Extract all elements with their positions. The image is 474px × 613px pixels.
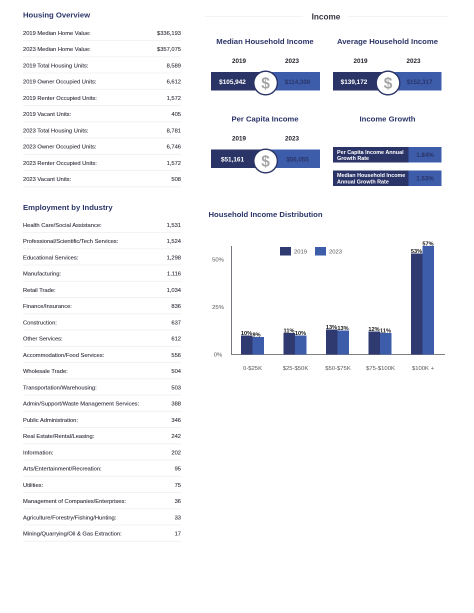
table: housing rows: 6,612 (167, 80, 181, 86)
bar chart: 11% (380, 328, 391, 334)
table: industry rows: Information: (23, 450, 54, 456)
legend (280, 247, 343, 256)
card: average household income: 2023 (406, 58, 421, 65)
table: industry rows: 17 (175, 532, 181, 538)
table: industry rows: Wholesale Trade: (23, 369, 68, 375)
bar chart (212, 242, 445, 372)
card: median household income: 2019 (232, 58, 246, 65)
card: per capita income: $51,161 (221, 157, 244, 164)
table: industry rows: 346 (171, 418, 181, 424)
table: housing rows: 8,589 (167, 64, 181, 70)
bar chart: 50% (212, 258, 225, 264)
table: industry rows: Accommodation/Food Services: (23, 353, 105, 359)
card: income growth: 1.84% (416, 152, 434, 159)
table: industry rows: 1,524 (167, 239, 182, 245)
card: income growth: Per Capita Income Annual (337, 150, 404, 156)
card: median household income: $114,300 (285, 79, 311, 86)
table: industry rows: Management of Companies/Enterprises: (23, 499, 126, 505)
table: housing rows: 2019 Renter Occupied Units: (23, 96, 97, 102)
bar chart: 53% (411, 249, 422, 255)
table: industry rows: 637 (171, 320, 181, 326)
table: industry rows: Finance/Insurance: (23, 304, 72, 310)
legend: 2023 (329, 250, 343, 256)
card: per capita income: 2023 (285, 136, 299, 143)
icon: dollar coin: $ (261, 76, 270, 92)
table: industry rows: Public Administration: (23, 418, 78, 424)
table: housing rows: 2019 Owner Occupied Units: (23, 80, 97, 86)
panel: employment by industry (23, 203, 182, 541)
card: per capita income (211, 115, 320, 173)
table: industry rows: 556 (171, 353, 181, 359)
table: housing rows: 2023 Total Housing Units: (23, 128, 89, 134)
card: income growth: Income Growth (360, 115, 416, 124)
table: housing rows: 2019 Total Housing Units: (23, 64, 89, 70)
table: industry rows: Admin/Support/Waste Management Services: (23, 402, 140, 408)
bar chart: $50-$75K (325, 366, 351, 372)
card: median household income (211, 37, 320, 95)
heading: income: Income (312, 12, 341, 21)
bar chart: 0% (214, 352, 223, 358)
table: industry rows: 1,298 (167, 256, 181, 262)
card: average household income: $152,317 (407, 79, 433, 86)
table: industry rows: 242 (171, 434, 181, 440)
table: industry rows: Mining/Quarrying/Oil & Gas Extraction: (23, 532, 122, 538)
card: income growth: Median Household Income (337, 173, 405, 179)
table: housing rows: 2023 Median Home Value: (23, 47, 91, 53)
table: industry rows: 503 (171, 386, 181, 392)
table: industry rows: Arts/Entertainment/Recreation: (23, 467, 102, 473)
bar chart: 13% (326, 325, 337, 331)
table: housing rows: 8,781 (167, 128, 181, 134)
table: housing rows: 1,572 (167, 96, 181, 102)
bar chart: 57% (422, 242, 434, 248)
card: median household income: 2023 (285, 58, 299, 65)
card: average household income: 2019 (353, 58, 368, 65)
table: industry rows: 504 (171, 369, 182, 375)
table: industry rows: 202 (171, 450, 181, 456)
bar chart: 0-$25K (243, 366, 262, 372)
bar chart: 11% (284, 328, 294, 334)
table: industry rows: 388 (171, 402, 181, 408)
table: industry rows: Agriculture/Forestry/Fishing/Hunting: (23, 516, 117, 522)
table: industry rows: 1,531 (167, 223, 181, 229)
table: housing rows: 2019 Median Home Value: (23, 31, 91, 37)
card: average household income: $139,172 (341, 79, 368, 86)
table: industry rows: Utilities: (23, 483, 44, 489)
bar chart: $25-$50K (283, 366, 308, 372)
bar chart: 25% (212, 305, 225, 311)
heading: housing overview: Housing Overview (23, 10, 90, 19)
table: industry rows (23, 223, 182, 541)
card: average household income: Average Household Income (337, 37, 439, 46)
card: per capita income: Per Capita Income (231, 115, 299, 124)
bar chart: $100K + (412, 366, 435, 372)
table: industry rows: Other Services: (23, 337, 63, 343)
bar chart: 13% (337, 326, 349, 332)
table: industry rows: Transportation/Warehousing: (23, 386, 97, 392)
table: industry rows: Real Estate/Rental/Leasing: (23, 434, 95, 440)
table: housing rows: 2019 Vacant Units: (23, 112, 72, 118)
table: housing rows: 2023 Owner Occupied Units: (23, 145, 97, 151)
table: industry rows: Construction: (23, 320, 57, 326)
table: industry rows: 36 (175, 499, 181, 505)
table: housing rows: 1,572 (167, 161, 181, 167)
table: housing rows (23, 31, 181, 187)
panel: income (205, 12, 448, 186)
table: industry rows: 1,116 (167, 272, 181, 278)
legend: 2019 (294, 250, 307, 256)
bar chart: 12% (368, 327, 380, 333)
table: industry rows: Health Care/Social Assistance: (23, 223, 102, 229)
card: per capita income: $56,055 (286, 157, 309, 164)
panel: housing overview (23, 10, 181, 187)
panel: household income distribution (208, 210, 445, 372)
heading: employment by industry: Employment by Industry (23, 203, 113, 212)
table: industry rows: Professional/Scientific/Tech Services: (23, 239, 119, 245)
table: industry rows: Educational Services: (23, 256, 79, 262)
card: per capita income: 2019 (232, 136, 246, 143)
table: housing rows: 508 (171, 177, 181, 183)
table: housing rows: 6,746 (167, 145, 181, 151)
table: industry rows: 1,034 (167, 288, 182, 294)
bar chart: 9% (252, 332, 261, 338)
table: industry rows: Manufacturing: (23, 272, 61, 278)
card: income growth: Annual Growth Rate (337, 180, 389, 186)
bar chart: 10% (241, 331, 252, 337)
table: industry rows: 33 (175, 516, 181, 522)
table: housing rows: 405 (171, 112, 181, 118)
heading: household income distribution: Household Income Distribution (208, 210, 323, 219)
card: average household income (333, 37, 442, 95)
table: housing rows: $357,075 (157, 47, 181, 53)
bar chart: 10% (295, 331, 306, 337)
table: industry rows: 95 (175, 467, 181, 473)
card: median household income: $105,942 (219, 79, 246, 86)
card: income growth: Growth Rate (337, 156, 369, 162)
bar chart: $75-$100K (366, 366, 395, 372)
table: housing rows: 2023 Vacant Units: (23, 177, 72, 183)
table: industry rows: 612 (171, 337, 181, 343)
table: housing rows: 2023 Renter Occupied Units: (23, 161, 97, 167)
table: industry rows: Retail Trade: (23, 288, 56, 294)
card: income growth: 1.53% (416, 176, 434, 182)
card: income growth (333, 115, 442, 186)
table: industry rows: 75 (175, 483, 181, 489)
table: industry rows: 836 (171, 304, 181, 310)
icon: dollar coin: $ (384, 76, 393, 92)
table: housing rows: $336,193 (157, 31, 181, 37)
card: median household income: Median Household Income (216, 37, 314, 46)
icon: dollar coin: $ (261, 154, 270, 170)
